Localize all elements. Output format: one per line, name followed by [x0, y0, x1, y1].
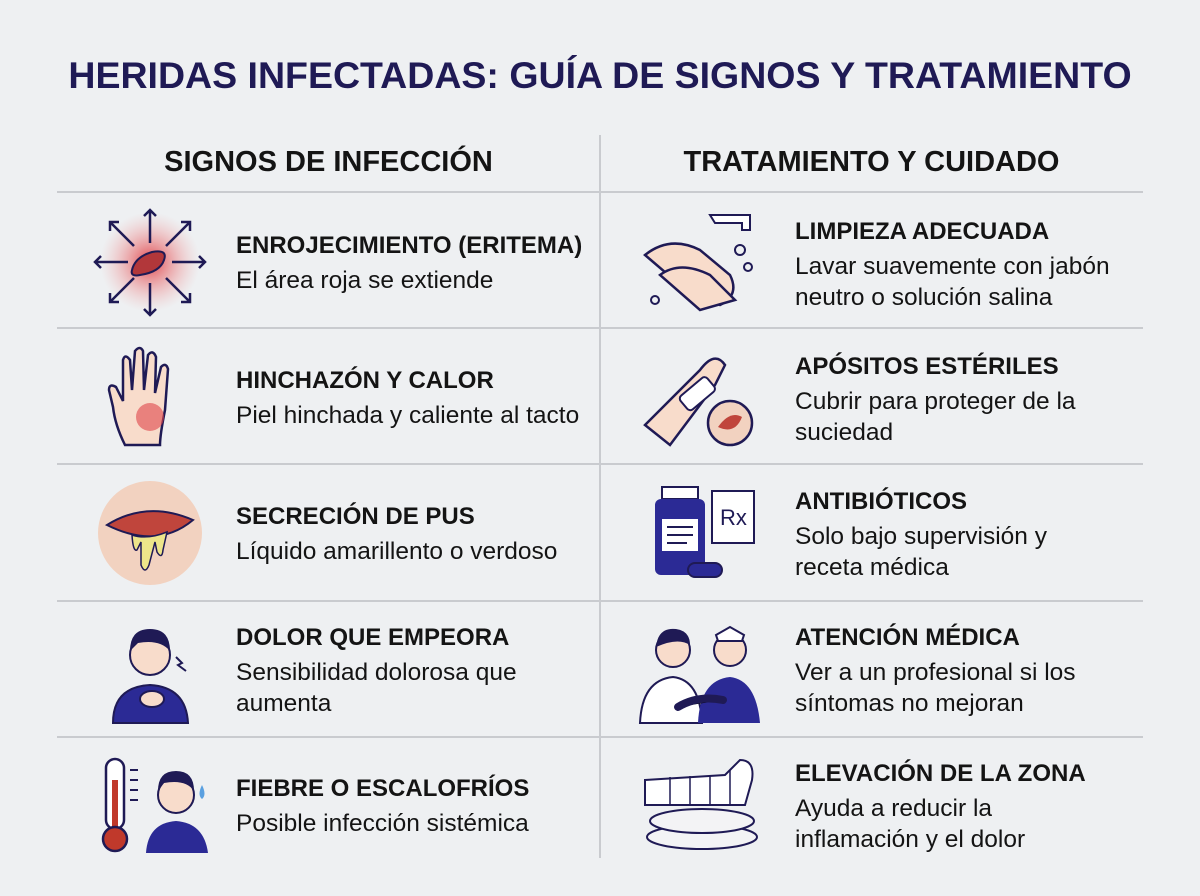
icon: pills rx: Rx [720, 505, 747, 530]
text: pus: Líquido amarillento o verdoso [236, 538, 557, 565]
text: atencion: Ver a un profesional si los [795, 659, 1076, 686]
text: limpieza: LIMPIEZA ADECUADA [795, 218, 1049, 245]
text: elevacion [795, 759, 1086, 853]
text: pus: SECRECIÓN DE PUS [236, 503, 475, 530]
text: apositos [795, 352, 1076, 446]
text: apositos: APÓSITOS ESTÉRILES [795, 353, 1059, 380]
icon: person pain [112, 629, 190, 724]
icon: washing hands [643, 214, 753, 312]
text: apositos: Cubrir para proteger de la [795, 388, 1076, 415]
text: dolor: aumenta [236, 690, 331, 717]
icon: doctor nurse [638, 626, 760, 724]
text: fiebre: Posible infección sistémica [236, 810, 529, 837]
icon: elevation [644, 759, 758, 850]
text: hinchazon: HINCHAZÓN Y CALOR [236, 367, 494, 394]
text: elevacion: ELEVACIÓN DE LA ZONA [795, 760, 1086, 787]
text: pus [236, 502, 557, 565]
text: dolor: Sensibilidad dolorosa que [236, 659, 517, 686]
title: HERIDAS INFECTADAS: GUÍA DE SIGNOS Y TRATAMIENTO [68, 54, 1132, 96]
text: atencion: síntomas no mejoran [795, 690, 1024, 717]
text: enrojecimiento: El área roja se extiende [236, 267, 493, 294]
icon: pus [98, 481, 202, 585]
text: limpieza: Lavar suavemente con jabón [795, 253, 1110, 280]
text: apositos: suciedad [795, 419, 893, 446]
text: dolor: DOLOR QUE EMPEORA [236, 624, 509, 651]
heading: signos: SIGNOS DE INFECCIÓN [164, 146, 493, 178]
icon: redness [93, 208, 207, 317]
text: enrojecimiento [236, 232, 582, 294]
text: hinchazon: Piel hinchada y caliente al tacto [236, 402, 579, 429]
text: atencion: ATENCIÓN MÉDICA [795, 624, 1020, 651]
text: enrojecimiento: ENROJECIMIENTO (ERITEMA) [236, 232, 582, 259]
text: elevacion: inflamación y el dolor [795, 826, 1025, 853]
text: antibioticos: ANTIBIÓTICOS [795, 488, 967, 515]
text: fiebre [236, 774, 529, 837]
text: antibioticos: receta médica [795, 554, 949, 581]
text: fiebre: FIEBRE O ESCALOFRÍOS [236, 775, 529, 802]
text: hinchazon [236, 366, 579, 429]
text: dolor [236, 624, 517, 717]
icon: pills rx [655, 486, 755, 578]
icon: hand swelling [108, 346, 170, 446]
icon: bandage [643, 357, 754, 447]
text: limpieza [795, 218, 1110, 311]
text: antibioticos [795, 487, 1047, 581]
text: antibioticos: Solo bajo supervisión y [795, 523, 1047, 550]
text: limpieza: neutro o solución salina [795, 284, 1052, 311]
icon: thermometer person [102, 758, 208, 853]
heading: tratamiento: TRATAMIENTO Y CUIDADO [684, 146, 1059, 178]
text: atencion [795, 623, 1076, 717]
text: elevacion: Ayuda a reducir la [795, 795, 992, 822]
